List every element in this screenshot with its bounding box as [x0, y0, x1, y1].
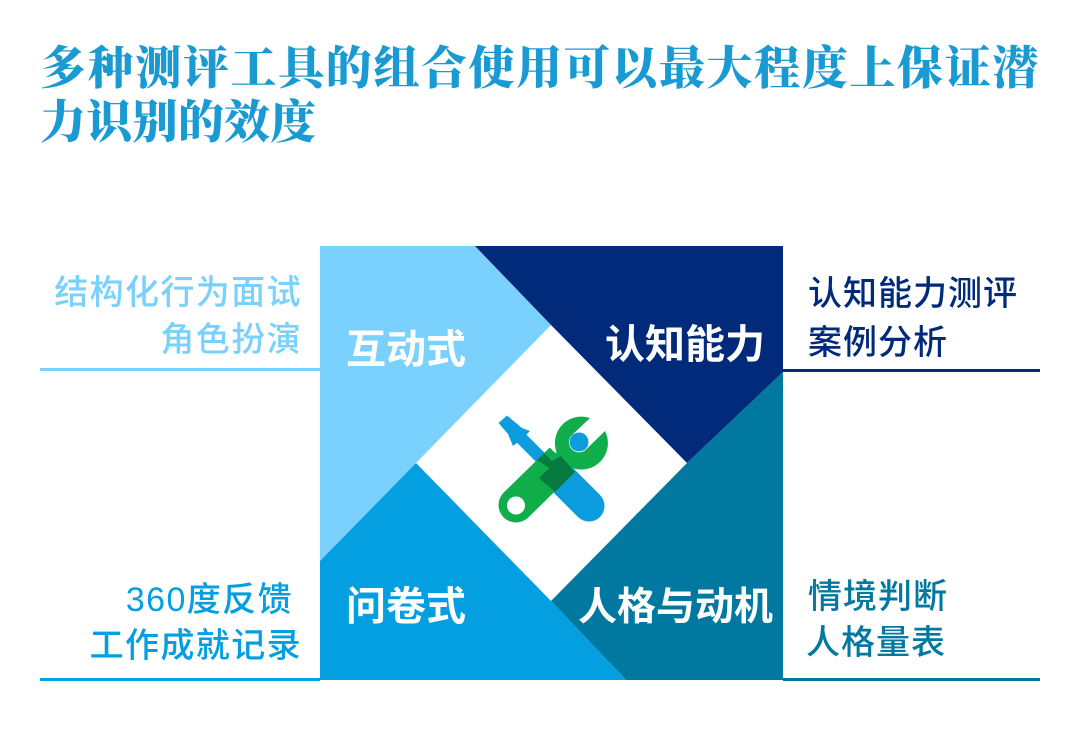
text: interactive tools: 结构化行为面试 [54, 274, 302, 312]
text: situational judgement: 情境判断 [808, 578, 948, 616]
title: 力识别的效度 [40, 97, 316, 148]
text: case analysis: 案例分析 [808, 324, 948, 362]
text: personality scale: 人格量表 [806, 624, 946, 662]
text: work records: 工作成就记录 [90, 627, 302, 665]
title [40, 43, 1040, 148]
label: cognitive ability: 认知能力 [605, 323, 765, 367]
panel: personality and motivation [551, 372, 783, 680]
label: questionnaire: 问卷式 [346, 585, 466, 629]
panel: questionnaire [320, 463, 626, 680]
label: interactive: 互动式 [346, 328, 466, 372]
title: 多种测评工具的组合使用可以最大程度上保证潜 [40, 43, 1040, 94]
line: questionnaire [40, 678, 320, 681]
text: role play: 角色扮演 [160, 321, 302, 359]
label: personality and motivation: 人格与动机 [578, 586, 773, 629]
text: 360 feedback: 360度反馈 [126, 581, 293, 619]
panel: interactive [320, 246, 551, 561]
line: cognitive [783, 369, 1040, 372]
panel: cognitive ability [475, 246, 783, 463]
line: personality [783, 678, 1040, 681]
text: cognitive test: 认知能力测评 [808, 275, 1018, 313]
line: interactive [40, 368, 320, 371]
icon: crossed tools [498, 416, 608, 522]
